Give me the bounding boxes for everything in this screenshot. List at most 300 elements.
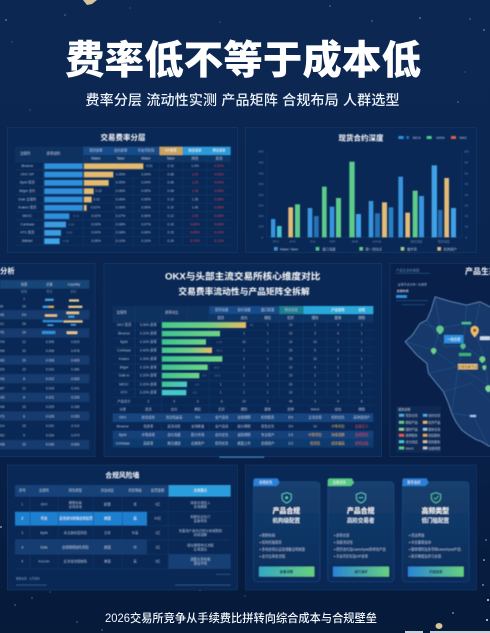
map info block: 全球节点分布 / 交易所 <box>398 281 427 286</box>
table header: 合约深度 <box>237 307 251 312</box>
comparison values <box>117 322 366 411</box>
table header: Maker <box>141 157 152 161</box>
comparison values: 期权 <box>194 406 202 411</box>
map legend: 现货交易 <box>406 413 418 418</box>
comparison values: 10 <box>289 391 293 395</box>
table header: 现货费率 <box>89 148 103 153</box>
risk table rows: 币安 <box>41 516 48 521</box>
panel: product compliance cards <box>246 465 476 590</box>
table values: 0.07% <box>141 222 151 226</box>
table header: 点差 <box>46 282 53 287</box>
bottom legend <box>274 246 457 251</box>
comparison values: 1 <box>220 391 222 395</box>
table values: Binance <box>21 164 33 168</box>
table values: 0.05% <box>116 172 125 176</box>
lower striped rows: 新兴市场 <box>191 432 205 437</box>
axes: 400 <box>259 171 264 175</box>
risk table footnotes: 数据来源 · 公开资料 <box>16 576 40 580</box>
risk table rows: 多地牌照 <box>194 504 208 509</box>
risk table header: 处罚金额 <box>151 488 165 493</box>
table values: 0.15 <box>167 222 174 226</box>
table header: 费率对比 <box>165 310 179 315</box>
card 1: 合规优先 <box>259 480 273 485</box>
table values: 1.40 <box>192 206 198 210</box>
top legend: MAS <box>459 136 467 140</box>
lower striped rows: 综合成本 <box>142 415 156 420</box>
lower striped rows: OKX <box>119 416 127 420</box>
comparison values: 1.21 <box>216 340 223 344</box>
risk table rows: Bybit <box>40 531 48 535</box>
risk table rows: 区域退出 <box>194 546 207 551</box>
table values: 0.040 <box>46 443 54 447</box>
lower striped rows: 低费率 <box>143 423 154 428</box>
comparison values: 2.0 <box>193 391 197 395</box>
table values: 0.114 <box>71 424 80 428</box>
table values: 0.079 <box>71 433 80 437</box>
table values: 0.05% <box>141 197 151 201</box>
table values: 0.021 <box>46 396 54 400</box>
comparison values: 理财 <box>241 406 248 411</box>
risk table rows: OKX <box>40 502 48 506</box>
table values: 15 <box>22 405 26 409</box>
table values: 0.360 <box>71 368 80 372</box>
map legend <box>396 406 441 453</box>
lower striped rows: 专业用户 <box>261 432 274 437</box>
comparison values: Coinbase <box>117 348 131 352</box>
card 1: • 机构托管服务 <box>260 540 282 545</box>
axes: DOGE <box>373 240 381 244</box>
comparison values: 0.20% 费率 <box>140 373 158 378</box>
striped rows <box>0 310 89 449</box>
table values: 0.04% <box>91 231 101 235</box>
table values: 0.403 <box>71 358 80 362</box>
comparison values: Kraken <box>119 357 129 361</box>
table header: 跟单 <box>335 315 342 320</box>
table values <box>0 297 80 447</box>
table values: 0.12% <box>214 239 224 243</box>
table header: 合约 <box>241 315 248 320</box>
comparison values: OKX 现货 <box>117 322 132 327</box>
comparison values: 1 <box>361 365 363 369</box>
comparison values: 1 <box>267 365 269 369</box>
map legend: 杠杆产品 <box>428 420 440 425</box>
lower striped rows: 合规用户 <box>261 440 274 445</box>
risk wall heading: 合规风险墙 <box>105 470 140 479</box>
comparison values: 3 <box>173 399 175 403</box>
map legend: 合约交易 <box>428 413 440 418</box>
table values: 0.02% <box>91 206 100 210</box>
table values: 0.06% <box>214 206 224 210</box>
risk table rows: 3亿 <box>155 559 161 564</box>
card 3 <box>402 478 469 582</box>
table values: 0.241 <box>71 386 80 390</box>
table values: 0.70% <box>190 239 200 243</box>
table header: 合规 <box>358 307 366 312</box>
table values: 0.03% <box>214 172 224 176</box>
risk table rows: 监管审查 <box>194 518 208 523</box>
comparison values: 1 <box>361 391 363 395</box>
lower striped rows: 中等费率 <box>142 432 156 437</box>
table values: 1.20 <box>192 172 198 176</box>
top legend: MiCA <box>413 136 422 140</box>
risk table rows: 3 <box>21 531 23 535</box>
table header: 持仓 <box>192 156 199 161</box>
table header: 合约费率 <box>114 148 128 153</box>
table values: 0.02% <box>214 164 224 168</box>
table values: 0.07% <box>116 214 125 218</box>
comparison values: 1 <box>267 348 269 352</box>
table header: 现货 <box>46 289 52 294</box>
map pins <box>431 326 490 392</box>
comparison values: 1 <box>267 399 269 403</box>
axes: 50 <box>465 182 468 186</box>
risk table rows: 未注册经营风险 <box>64 530 88 535</box>
comparison values: 10.0 <box>214 374 221 378</box>
comparison values: 9 <box>337 399 339 403</box>
axes: 500 <box>259 150 264 154</box>
table values: 0.04% <box>141 172 151 176</box>
lower striped rows: 3% <box>288 424 293 428</box>
lower striped rows: Bybit <box>119 433 126 437</box>
panel: compliance risk wall <box>7 465 237 590</box>
axes: 200 <box>259 214 264 218</box>
table values: 0.45 <box>63 239 69 243</box>
table values: 1 <box>23 297 25 301</box>
comparison values: Bybit <box>120 340 128 344</box>
card 3: 低门槛配置 <box>422 516 450 524</box>
card 2: • 费率优惠 <box>334 533 350 538</box>
table values: 0.300 <box>71 377 80 381</box>
lower striped rows: 机构服务 <box>261 415 275 420</box>
comparison values: 1 <box>267 382 269 386</box>
table header: 杠杆 <box>287 315 295 320</box>
comparison values: 1 <box>267 391 269 395</box>
comparison values: 1 <box>337 357 339 361</box>
lower striped rows: 机构优先 <box>331 415 345 420</box>
risk table footnotes <box>16 574 231 585</box>
table values: 0.04% <box>214 181 224 185</box>
comparison values: 4 <box>337 323 339 327</box>
table values: 1.25 <box>192 181 198 185</box>
risk table rows: 日本 <box>104 530 111 535</box>
comparison values: 1 <box>243 374 245 378</box>
lower striped rows: 5% <box>195 416 200 420</box>
map info block: 产品生态布局图 <box>396 267 420 272</box>
axes: 30 <box>465 204 468 208</box>
axes: 350 <box>259 182 264 186</box>
card 3: 新手友好 <box>407 480 421 485</box>
comparison values: 45 <box>289 399 293 403</box>
risk table header: 合规要点 <box>194 488 208 493</box>
card 1: • 多地合规认证及储备证明披露 <box>260 547 306 552</box>
table values: 0.06% <box>141 206 151 210</box>
card 3: 开始选择 <box>429 569 443 574</box>
map labels <box>444 322 490 417</box>
table values: Coinbase <box>20 222 35 226</box>
map legend: Web3 <box>406 446 414 450</box>
map legend: 跟单交易 <box>428 427 440 432</box>
axes: 300 <box>259 193 264 197</box>
table values: 15 <box>22 358 26 362</box>
table values: 0.05% <box>141 189 151 193</box>
lower striped rows: 全球牌照 <box>237 415 251 420</box>
table values: 12 <box>22 386 26 390</box>
comparison values: 6 <box>361 399 363 403</box>
comparison values: 1 <box>243 391 245 395</box>
table values: 0.015 <box>46 386 54 390</box>
table values: 10 <box>22 368 26 372</box>
table header: Maker <box>91 157 102 161</box>
comparison values: 10 <box>313 357 317 361</box>
table values: 0.70 <box>73 214 79 218</box>
table values: OKX VIP <box>21 172 35 176</box>
risk table rows: 牌照布局 <box>69 500 83 505</box>
table values: 0.10 <box>167 164 174 168</box>
table values: 1.35 <box>192 197 198 201</box>
table header: 合约 <box>70 289 76 294</box>
table header: Liquidity <box>68 283 80 287</box>
comparison values: 3 <box>337 348 339 352</box>
lower striped rows: 主流合规 <box>308 415 322 420</box>
comparison values: 0.20% 费率 <box>140 390 158 395</box>
comparison values: 10 <box>289 323 293 327</box>
table values: 0.02 <box>95 189 102 193</box>
table values: 0.034 <box>46 433 54 437</box>
table values: 0.06% <box>116 189 125 193</box>
panel: spot and futures depth chart <box>246 127 476 253</box>
blue and gold bars <box>44 163 143 244</box>
comparison values: 1 <box>361 374 363 378</box>
risk table rows: 1亿 <box>155 530 161 535</box>
table header: 产品矩阵 <box>331 307 345 312</box>
card 1: 查看详情 <box>280 569 294 574</box>
lower striped rows: 高流动性 <box>167 423 181 428</box>
table values: 0.08% <box>214 214 224 218</box>
table header <box>15 147 231 162</box>
table values: 0.08 <box>167 189 174 193</box>
risk table rows: 1 <box>21 502 23 506</box>
axes: 合约深度 <box>410 239 422 244</box>
card 2: • 深度流动性 <box>334 540 353 545</box>
table values <box>18 164 224 243</box>
table values: 0.09% <box>214 222 224 226</box>
table values: Bitget 合约 <box>19 188 36 193</box>
card 2: 高阶交易者 <box>347 516 375 524</box>
lower striped rows: 全产品线 <box>215 423 229 428</box>
table values: 1% <box>22 313 26 317</box>
table values: 0.10% <box>116 239 125 243</box>
comparison values: 0.10% 费率 <box>140 330 158 335</box>
bottom legend: 机构用户 <box>444 246 457 251</box>
title: 费率低不等于成本低 <box>65 38 422 83</box>
table header: 实测 <box>216 156 223 161</box>
table header: 现货 <box>217 315 225 320</box>
bottom legend: 盘口深度 <box>322 246 336 251</box>
comparison values: 1 <box>220 382 222 386</box>
map info block <box>396 267 430 305</box>
table values: 0.01 <box>146 164 153 168</box>
table header: 现货深度 <box>215 307 229 312</box>
lower striped rows: 合约深度 <box>167 432 181 437</box>
comparison values: Web3 <box>311 407 319 411</box>
comparison values: HTX <box>121 391 128 395</box>
table values: 0.10 <box>167 206 174 210</box>
table header: Taker <box>117 157 126 161</box>
risk table rows: 美国 <box>104 516 111 521</box>
risk table rows: 反洗钱流程缺陷 <box>64 559 88 564</box>
risk table rows: KuCoin <box>39 560 50 564</box>
lower striped rows: 2.0 <box>288 441 293 445</box>
table values: 0.65% <box>190 231 200 235</box>
risk table rows: 43亿 <box>154 516 162 521</box>
lower striped rows: 现货优先 <box>215 440 229 445</box>
table values: 0.06% <box>116 197 125 201</box>
card 2 <box>328 478 394 582</box>
risk table rows: 美国 <box>104 559 111 564</box>
card 3: • 跟单理财及多币种Launchpad产品 <box>409 547 462 552</box>
top legend <box>398 136 467 140</box>
lower striped rows: 合约优先 <box>215 432 229 437</box>
risk table rows: 反洗钱与制裁合规处罚 <box>59 516 93 521</box>
table header: 平台币折扣 <box>138 148 154 153</box>
table header: 综合成本 <box>188 148 202 153</box>
comparison values: 1 <box>361 382 363 386</box>
lower striped rows: 高净值用户 <box>353 415 370 420</box>
mini bars <box>42 299 83 334</box>
comparison values: 1 <box>337 382 339 386</box>
comparison values: 4 <box>314 365 316 369</box>
lower striped rows: 中等风险 <box>308 432 322 437</box>
comparison bars <box>162 322 246 395</box>
risk table rows: 0亿 <box>155 501 161 506</box>
card 2: 进行测评 <box>354 569 368 574</box>
table values: 0.02% <box>91 214 101 218</box>
comparison values: 3 <box>147 399 149 403</box>
card 1: 产品合规 <box>273 506 300 515</box>
table header: 盘口厚度 <box>261 307 275 312</box>
risk table rows: 合规牌照缺失风险 <box>62 544 89 549</box>
table header: 深度 <box>21 282 28 287</box>
comparison values: 1 <box>361 340 363 344</box>
risk table rows: 中高 <box>132 530 139 535</box>
table values: 0.10 <box>167 197 174 201</box>
map info block: 合规布局 <box>397 288 409 293</box>
lower striped rows: 全产品线 <box>215 415 229 420</box>
lower striped rows: 5% <box>288 416 293 420</box>
comparison values: 10 <box>313 340 317 344</box>
map legend: 图例说明 <box>398 407 410 412</box>
risk table rows: 退出市场 <box>194 561 208 566</box>
comparison values: 2.0 <box>195 382 199 386</box>
axes: 100 <box>259 225 264 229</box>
comparison values: 1 <box>243 357 245 361</box>
risk table header <box>15 485 231 497</box>
lower striped rows: 低风险 <box>310 440 321 445</box>
axes: 250 <box>259 204 264 208</box>
comparison values: 1 <box>267 374 269 378</box>
table values: 1.50 <box>192 214 198 218</box>
risk table header: 交易所 <box>39 488 50 493</box>
risk table rows: 完善用户身份识别与地域限制 <box>179 528 223 533</box>
comparison values: 合约 <box>171 406 178 411</box>
table values: 0.02 <box>93 197 100 201</box>
table header: 理财 <box>312 315 319 320</box>
risk table header: 涉及地区 <box>101 488 115 493</box>
table values: 0.005 <box>46 340 54 344</box>
comparison values: 1 <box>243 348 245 352</box>
scroll indicator <box>219 457 264 458</box>
comparison values: 1 <box>337 340 339 344</box>
lower striped rows: 美元通道 <box>167 440 181 445</box>
axes: BNB <box>352 240 358 244</box>
card 1: • 全方位审查流程 <box>260 554 286 559</box>
table values: 12 <box>22 340 26 344</box>
comparison values: 4 <box>337 331 339 335</box>
comparison values: 10.2 <box>214 365 220 369</box>
card 3: • 中文客服支持 <box>409 540 432 545</box>
table values: 0.012 <box>46 377 54 381</box>
axes: 60 <box>465 171 468 175</box>
comparison values: 现货 <box>145 406 152 411</box>
comparison values: 10 <box>289 365 293 369</box>
map legend: 合规牌照 <box>428 445 440 450</box>
comparison values: 0.10% 费率 <box>140 364 158 369</box>
comparison values: 跟单 <box>264 406 272 411</box>
comparison values: 6 <box>221 399 223 403</box>
panel: OKX core comparison <box>104 263 382 458</box>
table values: Kraken 现货 <box>18 205 37 210</box>
table values: BitMart <box>22 239 33 243</box>
map legend: 质押服务 <box>406 433 418 438</box>
axes: 80 <box>465 161 468 165</box>
map legend: 理财产品 <box>406 427 418 432</box>
table values: 26 <box>22 322 26 326</box>
comparison values: 3 <box>314 399 316 403</box>
comparison values: 1 <box>314 391 316 395</box>
table values: 0.10% <box>214 231 224 235</box>
comparison values: 1 <box>267 340 269 344</box>
comparison values: 0.40% 费率 <box>140 347 158 352</box>
map region <box>405 297 490 447</box>
axes <box>259 150 469 244</box>
map legend: 钱包服务 <box>428 433 440 438</box>
risk table header: 序号 <box>19 488 26 493</box>
table header <box>113 306 373 322</box>
panel: product ecosystem map (cropped right) <box>390 263 490 457</box>
card 1 <box>253 478 320 582</box>
risk table rows: 美国 <box>104 544 111 549</box>
comparison values: 1 <box>361 357 363 361</box>
top legend: VARA <box>436 136 446 140</box>
lower striped rows: 中等风险 <box>331 423 345 428</box>
table values: 0.08% <box>141 231 151 235</box>
comparison values: 0.08% 费率 <box>140 322 158 327</box>
table grid <box>113 306 373 443</box>
table header: 数据 <box>21 289 27 294</box>
card 1: 机构级配置 <box>273 516 301 524</box>
table values: 0.06% <box>141 214 151 218</box>
lower striped rows: 部分牌照 <box>237 423 251 428</box>
comparison values: 3 <box>197 399 199 403</box>
risk table rows: 中 <box>133 544 137 549</box>
table values: 1.0% <box>191 164 199 168</box>
table header: VIP费率 <box>165 148 177 153</box>
table values: MEXC <box>23 214 33 218</box>
comparison subtitle: 交易费率流动性与产品矩阵全拆解 <box>178 285 310 296</box>
risk table rows: 高 <box>133 559 137 564</box>
lower striped rows: 高费率 <box>143 440 154 445</box>
risk table rows: 5 <box>21 560 23 564</box>
